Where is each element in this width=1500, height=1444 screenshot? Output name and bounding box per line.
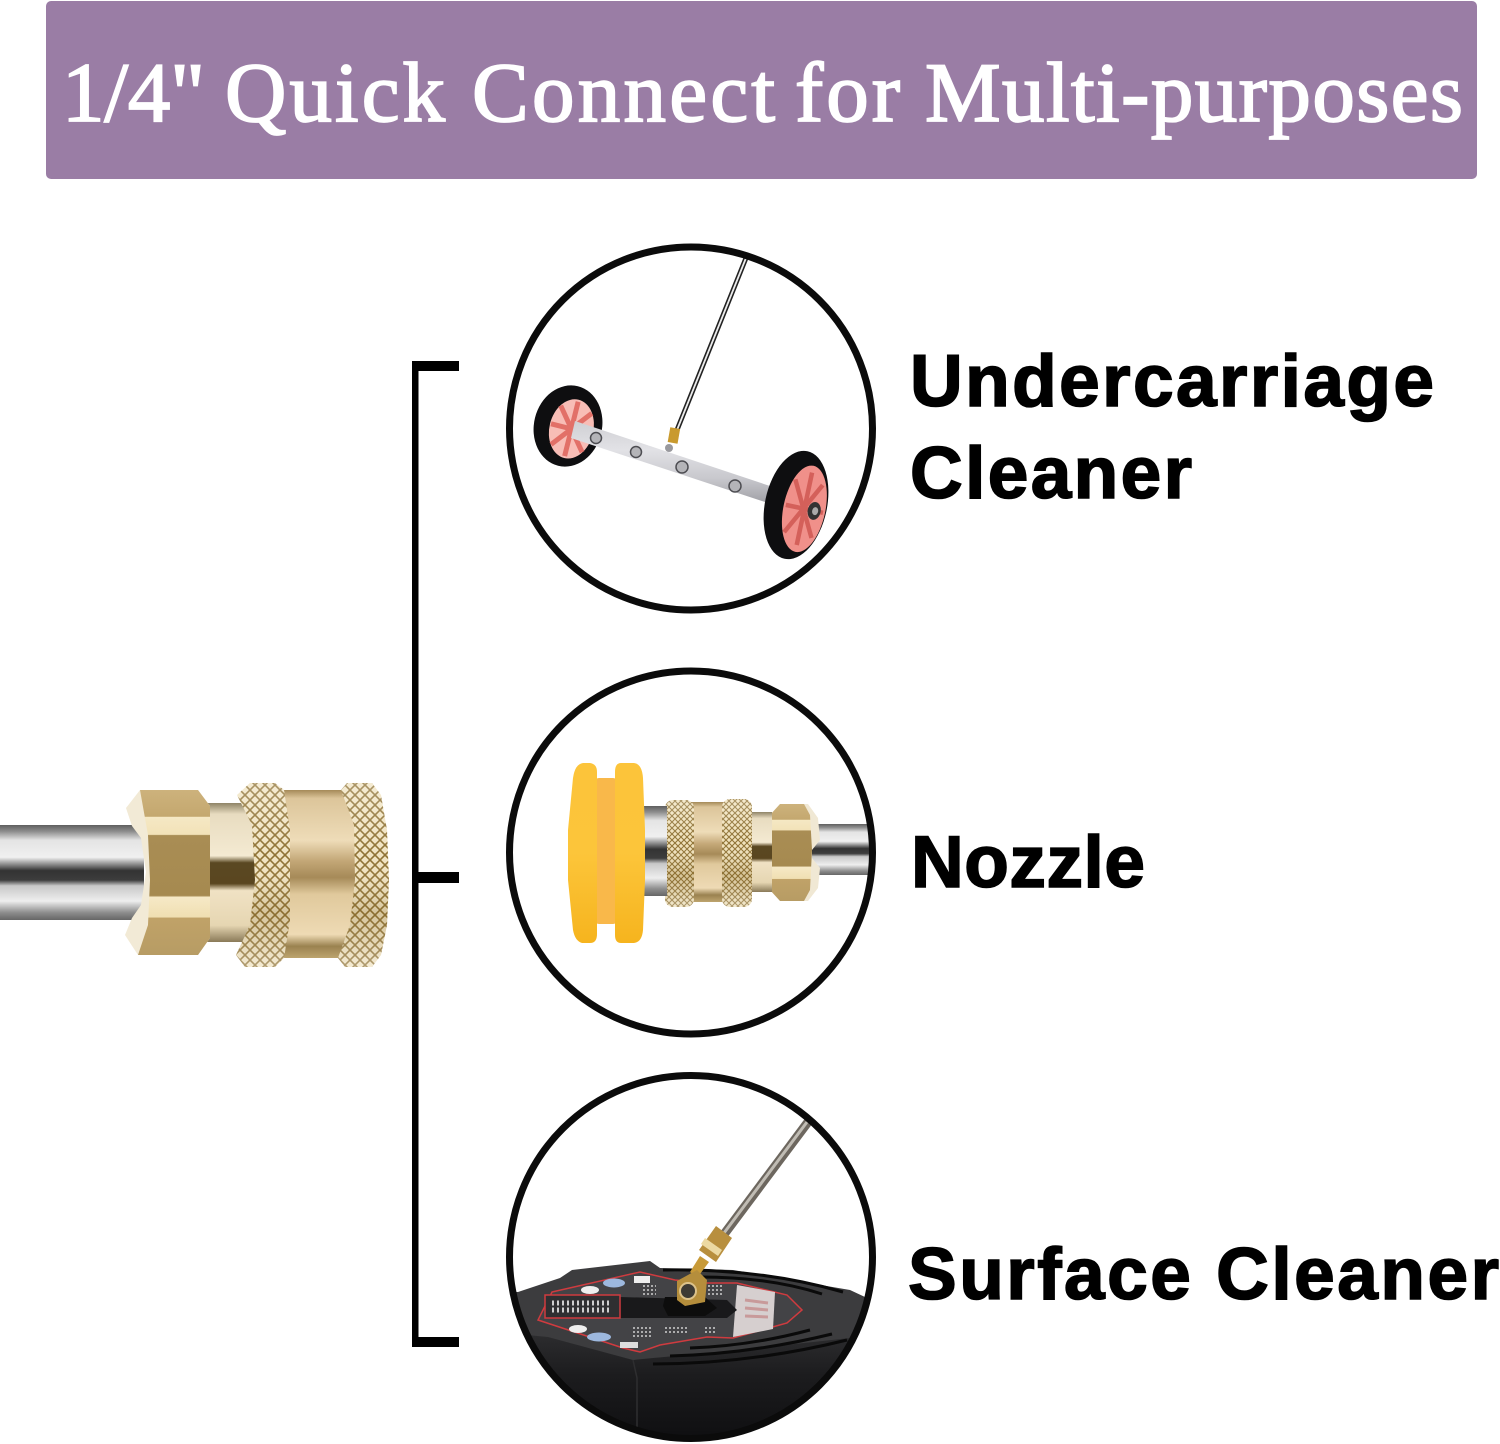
warning label: [538, 1272, 802, 1352]
vents: [653, 1270, 847, 1364]
barrel: [283, 790, 355, 958]
steel pipe: [0, 825, 144, 920]
hex nut: [770, 804, 820, 901]
skirt crease: [633, 1360, 637, 1444]
label white panel: [733, 1285, 775, 1337]
title text: Connect: [472, 46, 775, 140]
circle: undercarriage cleaner: [510, 247, 872, 610]
label pink lines: [745, 1300, 768, 1317]
lower skirt: [532, 1336, 850, 1435]
knurl right: [722, 799, 752, 907]
title text: for: [795, 46, 900, 140]
cleaner body: [516, 1261, 864, 1360]
knurled ring right: [338, 783, 389, 967]
title text: Multi-purposes: [925, 46, 1463, 140]
hex nut: [125, 790, 210, 955]
bracket connector: [412, 361, 459, 1347]
spray nozzles: [590, 432, 741, 492]
label red box: [545, 1295, 620, 1318]
title text: Quick: [225, 46, 446, 140]
label: undercarriage cleaner: [910, 341, 1434, 514]
pipe: [812, 824, 869, 875]
label: surface cleaner: Surface Cleaner: [908, 1234, 1499, 1315]
brass fitting: [665, 427, 680, 452]
neck: [752, 812, 772, 892]
brass elbow: [677, 1270, 707, 1306]
neck: [203, 803, 255, 942]
label: undercarriage cleaner: Cleaner: [910, 433, 1192, 514]
right wheel: [764, 450, 828, 560]
circle: surface cleaner: [495, 1076, 885, 1444]
brass fitting: [690, 1226, 732, 1278]
elbow opening: [680, 1283, 696, 1299]
label: nozzle: Nozzle: [911, 822, 1145, 903]
knurled ring left: [236, 783, 290, 967]
silver stem: [643, 806, 667, 896]
label black strip: [620, 1297, 737, 1318]
label details: [552, 1276, 722, 1348]
knurl left: [665, 800, 694, 907]
tube: [571, 421, 773, 503]
yellow nozzle head: [568, 763, 645, 943]
circle: nozzle: [510, 671, 877, 1034]
title banner: [46, 1, 1477, 179]
main brass quick connect coupler: [0, 783, 389, 967]
barrel: [691, 802, 724, 902]
left wheel: [534, 385, 602, 467]
wand: [724, 1122, 808, 1233]
title text: 1/4": [62, 46, 205, 140]
label: undercarriage cleaner: Undercarriage: [910, 341, 1434, 422]
collar: [663, 1297, 717, 1316]
wand: [677, 258, 746, 430]
